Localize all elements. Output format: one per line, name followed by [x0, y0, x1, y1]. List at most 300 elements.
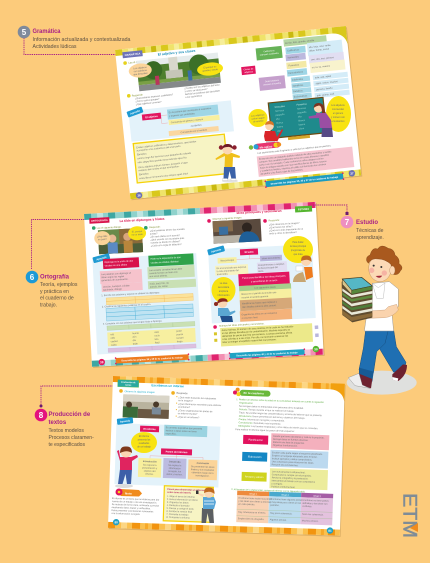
table: evaluation: definidas y las ideas son	[302, 503, 328, 506]
box: desarrollo: Desarrollo	[169, 461, 181, 464]
table: yellow words: baile	[133, 343, 139, 346]
box: pink examples: tildan según las reglas	[101, 275, 125, 279]
callout 7: Estudio: Técnicas de	[356, 228, 384, 234]
section two questions: ¿Qué adjetivos conoces?	[136, 100, 162, 106]
text block: instructions: Conclusiones: Resultado más importante.	[238, 421, 281, 426]
text block: instructions: 1. Realiza un informe sobre la salud en tu comunidad, teniendo en cuenta lo siguiente:	[236, 398, 325, 404]
speech bubble: boy: el nombre	[253, 119, 264, 124]
diagram: clases de adjetivos: Determinativos	[265, 79, 279, 83]
blackboard: clara	[299, 127, 305, 130]
box: pink rule: y secundarias de un texto	[251, 279, 278, 283]
box: introducción: objetivo del	[144, 470, 156, 473]
blackboard: blanco	[276, 122, 284, 125]
speech bubble: yellow	[196, 61, 224, 77]
yellow box: examples	[133, 134, 228, 183]
callout 6: Ortografía: y práctica en	[40, 289, 69, 295]
text: planificación: Decide qué tema abordarás y cuál es tu propósito.	[273, 435, 325, 440]
table: yellow words: día	[133, 340, 137, 342]
text: revisión y edición: Revisa la ortografía y la puntuación.	[272, 476, 309, 481]
section two questions	[144, 224, 187, 248]
section one heading: Observa la siguiente imagen	[124, 390, 155, 394]
yellow box: pasos: 7. Presenta tu trabajo	[166, 513, 189, 517]
text block: instructions: Cuerpo: Información recogida y comprobada.	[239, 418, 285, 423]
box: desarrollo: recogida, los	[168, 470, 182, 473]
box: introducción: informe.	[145, 473, 154, 476]
table: orange	[106, 293, 193, 305]
blackboard: hermosa	[297, 107, 307, 111]
blackboard: buena	[299, 124, 306, 127]
box: planificación: Planificación	[248, 438, 264, 442]
callout 5: Gramática: Gramática	[32, 29, 61, 35]
logo: ETM: ETM	[398, 493, 420, 538]
box: introducción	[138, 458, 161, 478]
callout 7: Estudio: aprendizaje.	[356, 235, 384, 241]
section two questions: un informe?	[178, 406, 191, 409]
box: green examples: una vocal abierta.	[149, 274, 168, 278]
speech bubble: yellow: grande y verde	[202, 68, 219, 73]
page number left: 38	[100, 360, 104, 364]
table: evaluation: Texto sin coherencia.	[302, 513, 324, 517]
table: evaluation: en cada párrafo.	[238, 503, 255, 506]
box: pink rule: Pasos para identificar las ideas principales	[242, 274, 287, 280]
section heading: Observa la siguiente imagen	[212, 216, 242, 221]
definition box: y expresa sus cualidades	[169, 112, 196, 118]
box: el informe: El informe	[143, 428, 156, 431]
table: yellow words: caída	[111, 344, 117, 347]
orange box: Concuerda con el nombre	[180, 128, 208, 134]
callout 8: Producción de textos	[35, 384, 122, 448]
speech bubble: sitting boy: la idea principal	[290, 245, 306, 248]
speech bubble: teacher: y número con	[331, 116, 346, 119]
diagram: clases de adjetivos: qué, cuánto, cuál	[317, 92, 335, 97]
diagram: clases de adjetivos: Demostrativos	[288, 70, 304, 75]
yellow box: examples: camino largo flor hermosa casa pequeña día soleado	[137, 152, 192, 160]
tag: estudio	[295, 206, 312, 212]
box: brown step: dan detalles sobre la idea central.	[242, 304, 277, 309]
yellow text box	[220, 323, 313, 347]
section questions: ¿Qué es lo más importante de un	[269, 228, 304, 232]
box: orange step: Organiza las ideas en un esquema	[241, 312, 278, 316]
yellow box: examples: Ejemplos:	[139, 173, 149, 176]
table: yellow words: Ismael	[177, 337, 184, 340]
text: idea principal	[215, 264, 248, 276]
table: evaluation	[236, 491, 333, 525]
section one heading: Lee el siguiente artículo	[128, 59, 155, 65]
text block: instructions: Bibliografía: Las fuentes empleadas y otros datos de interés que se consultan.	[238, 425, 318, 430]
section two questions: ¿Qué palabras tienen dos vocales	[150, 228, 186, 233]
box: pink examples	[100, 269, 142, 284]
yellow box: pasos: 8. Comparte tu informe	[166, 516, 191, 520]
yellow box: examples: acompañar a los sustantivos del enunciado.	[136, 145, 181, 152]
page number left: 36	[137, 193, 141, 198]
section two questions: ¿Qué sucede con la palabra país	[150, 237, 185, 242]
heading pill: en tu cuaderno	[233, 387, 271, 397]
tag: aprendo: Aprendo	[96, 256, 107, 261]
diagram: clases de adjetivos: Indefinidos	[292, 79, 304, 82]
text paragraph: nota: cuenta de un trabajo o de una investigación.	[112, 500, 157, 505]
section heading	[207, 216, 242, 223]
section one heading: Lee el siguiente diálogo.	[97, 226, 122, 230]
yellow box: pasos: 1. Elige el tema del informe	[167, 495, 196, 499]
text block: instructions: Organización	[239, 401, 253, 405]
text: elaboración: Resume las conclusiones.	[272, 464, 299, 467]
table: evaluation: y las ideas son claras y precisas	[238, 500, 272, 504]
speech bubble: orange: que describen	[133, 72, 149, 76]
blackboard: pequeña	[297, 111, 307, 115]
box: definition: específico.	[166, 433, 177, 436]
speech bubble: sitting girl: secundaria	[218, 286, 230, 289]
page title: Escribimos un informe	[151, 383, 184, 388]
diagram: clases de adjetivos: Gentilicios	[293, 84, 304, 88]
pink text box: Érase una vez un pequeño pueblo rodeado de altas montañas y verdes	[259, 150, 332, 161]
blackboard: alta	[298, 115, 302, 119]
box: pink words	[101, 282, 143, 292]
text block: instructions: Título: Se escribe según las características y el tema del informe que se presenta	[239, 411, 322, 417]
panel: aprendo: 3. Completa con las palabras que tengan hiato o diptongo.	[103, 320, 163, 326]
box: green examples	[147, 265, 195, 279]
diagram: clases de adjetivos: Calificativos	[263, 49, 275, 53]
diagram: clases de adjetivos: precisan al nombre	[263, 82, 282, 86]
lavender squares	[315, 325, 319, 337]
text paragraph: nota	[111, 497, 160, 517]
callout 5: Gramática	[18, 26, 131, 56]
bottom bar left	[115, 353, 190, 364]
yellow box: examples: estos libros mi hermana dos amigos aquel árbol	[139, 172, 189, 180]
panel: aprendo	[126, 97, 234, 142]
speech bubble: boy: varían según	[251, 116, 266, 121]
pink text box: hacia la antigua escuela con sus mochilas llenas de libros nuevos	[260, 160, 327, 170]
character: boy carrying books	[342, 246, 417, 395]
character: boy with phone	[196, 487, 216, 523]
photo: students	[213, 219, 262, 244]
box: planificación	[243, 435, 268, 445]
panel: aprendo: accidentes	[191, 123, 203, 128]
page title left: La tilde en diptongos y hiatos	[119, 217, 165, 223]
speech bubble: sitting girl: La idea	[220, 283, 228, 285]
text paragraph: nota: El informe es un texto que se elabora para dar	[112, 497, 159, 502]
spread: ortografía y estudio	[84, 202, 325, 368]
box: introducción: presentación y	[142, 467, 158, 470]
speech bubble: sitting boy: Para hallar	[292, 241, 304, 244]
diagram: clases de adjetivos: Calificativos	[287, 48, 300, 53]
callout 5: Gramática: Actividades lúdicas	[32, 44, 77, 50]
text block: instructions: Se recogen datos en entrevistas a las personas de tu localidad.	[239, 405, 304, 410]
table: evaluation: y hay ideas poco claras en los	[270, 501, 302, 505]
text: ideas secundarias: Complementan o amplían	[258, 263, 285, 267]
box: pink rule	[238, 272, 290, 286]
yellow text box: alimentan de peces que hoy son escasos. La pesca excesiva afecta	[222, 331, 293, 338]
box: green words: poesía, tía, reúne	[150, 285, 169, 289]
box: conclusión	[188, 459, 217, 480]
tag: aprendo: Aprendo	[130, 109, 141, 116]
page number right: 39	[314, 347, 318, 351]
box: idea principal: Idea principal	[220, 259, 235, 262]
speech bubble: sitting boy	[283, 236, 313, 263]
box: yellow step	[239, 289, 292, 301]
text paragraph: nota: empleando datos reales y verificables.	[112, 506, 151, 510]
speech bubble: orange	[128, 62, 152, 79]
section two questions: Responde	[132, 93, 143, 98]
box: yellow step: Busca en el párrafo la oración que	[241, 291, 277, 296]
table: yellow words: aún	[132, 336, 137, 339]
callout 6: Ortografía: Ortografía	[40, 274, 70, 280]
callout 8: Producción de textos: Textos modelos	[48, 428, 84, 434]
yellow box: pasos: 6. Escribe la versión final	[166, 510, 193, 514]
character: sitting boy	[293, 255, 313, 282]
pill: nota: Nota	[125, 492, 132, 496]
tag: aprendo: Aprendo	[120, 419, 131, 424]
section questions: texto y cómo lo identificas?	[269, 231, 298, 235]
callout 6: Ortografía: el cuaderno de	[40, 296, 74, 302]
speech bubble: sitting girl: información	[218, 294, 230, 297]
pink text box	[257, 147, 354, 177]
section two questions: Responde:	[176, 392, 188, 395]
table: evaluation: Nivel 2	[281, 494, 290, 497]
speech bubble: teacher: en género	[333, 112, 344, 115]
callout 8: Producción de textos: Procesos claramen-	[48, 435, 94, 441]
page number right	[313, 346, 319, 352]
diagram: clases de adjetivos: uno, dos, tres, primero	[311, 56, 335, 61]
bottom bar: Desarrolla las páginas 35, 36 y 37 de tu cuaderno de trabajo	[271, 176, 339, 186]
text: elaboración: Emplea un lenguaje apropiado para el lector.	[272, 454, 318, 459]
definition box	[167, 104, 219, 120]
diagram: clases de adjetivos: Numerales	[288, 55, 300, 59]
panel: aprendo	[207, 241, 316, 324]
section two questions: ¿Qué están haciendo los estudiantes	[178, 396, 217, 400]
box: pink examples: Las palabras con diptongo se	[101, 272, 132, 276]
box: pink words: aguántate, diálogo	[103, 288, 123, 292]
section one heading	[119, 389, 156, 394]
text paragraph: nota: Debe presentar conclusiones coherentes	[111, 509, 154, 513]
callout 7: Estudio: Estudio	[356, 220, 378, 226]
text block: instructions: Período: Tiempo durante el que se realizará el trabajo.	[239, 408, 295, 413]
callout 8: Producción de textos: Producción de	[48, 412, 91, 418]
callout 7: Estudio: 7	[345, 218, 350, 227]
speech bubble: yellow: Sí, porque	[132, 230, 143, 234]
table: yellow words: cielo	[154, 332, 160, 334]
speech bubble: girl: El informe	[139, 435, 150, 438]
text: idea principal: lo más importante del	[217, 269, 239, 273]
table: yellow words: puerta	[176, 333, 184, 336]
diagram: clases de adjetivos: algún, varios, muchos	[315, 80, 339, 85]
speech bubble: yellow: El parque es	[203, 65, 217, 69]
speech bubble: sitting girl	[212, 277, 236, 303]
yellow box: examples: Ejemplos:	[137, 153, 147, 156]
page number right	[327, 527, 333, 534]
page title right: Ideas principales y secundarias	[236, 209, 282, 215]
table: evaluation: El informe tiene algunas partes	[270, 498, 303, 502]
callout 8: Producción de textos: te especificados	[48, 442, 85, 448]
text: planificación: Recoge datos en fuentes diversas.	[273, 438, 309, 442]
table: evaluation: Algunos errores.	[270, 518, 287, 522]
yellow box: pasos: 3. Organiza los datos	[167, 501, 189, 505]
box: pink words: canción, huésped, cuídate	[103, 284, 130, 289]
panel: aprendo	[114, 417, 221, 488]
yellow text box: a las colonias y a sus crías. Por ello, es necesario conservar las	[222, 334, 289, 341]
tag: producción de textos: Producción de	[121, 381, 136, 384]
section two questions	[170, 391, 222, 420]
pink text box: y cuadernos limpios, mientras el cálido sol iluminaba los caminos	[260, 163, 327, 173]
yellow text box: en las últimas décadas por la contaminación. Muchas especies se	[222, 328, 291, 335]
yellow box: examples: niño alegre libro grande mesa redonda agua fría	[138, 156, 187, 164]
section two questions: ¿Cómo organizarías las partes de	[178, 409, 213, 413]
section questions: Responde:	[269, 220, 280, 222]
spread: gramática	[115, 26, 362, 202]
text: planificación: Elabora una lista de preguntas.	[273, 441, 305, 445]
box: yellow step: resume el sentido general.	[242, 295, 269, 299]
speech bubble: sitting boy: qué trata	[293, 253, 303, 256]
box: diptongo	[103, 257, 139, 269]
diagram: clases de adjetivos: mi, tu, su, nuestro	[312, 64, 331, 69]
box: green words: maíz, baúl, frío, río	[150, 282, 170, 286]
section two questions: ¿Cuáles son los adjetivos del texto	[184, 83, 221, 90]
text block: instructions	[235, 398, 325, 434]
tag: estudio: ESTUDIO	[298, 208, 309, 211]
text: planificación: Organiza la información.	[273, 444, 298, 448]
callout 6: Ortografía	[26, 220, 90, 308]
callout 5: Gramática: 5	[22, 28, 27, 37]
text: elaboración: Usa conectores para relacionar las ideas.	[272, 460, 314, 465]
speech bubble: teacher: el sustantivo	[332, 120, 345, 123]
section two questions: cuando se divide en sílabas?	[151, 241, 181, 245]
page number right	[348, 170, 355, 177]
section two questions: ¿Cómo está el parque?	[135, 98, 160, 103]
box: ideas secundarias: Ideas secundarias	[262, 256, 281, 260]
callout 6: Ortografía: 6	[30, 273, 35, 282]
yellow box: examples: Existen adjetivos calificativos y determinativos, que pueden	[136, 140, 197, 149]
section three heading	[213, 322, 265, 329]
section two questions: y cómo se relacionan?	[184, 88, 208, 93]
box: orange step: o resumen final.	[242, 316, 258, 320]
section one heading	[123, 58, 155, 65]
section questions: ¿Qué observas en la imagen?	[269, 222, 300, 226]
section two questions: Señala las palabras que describen	[185, 89, 221, 96]
yellow box: pasos: sobre tema de interés	[167, 491, 192, 495]
diagram: clases de adjetivos: adjetivos	[244, 70, 254, 74]
box: definition: Es un texto expositivo que presenta	[166, 426, 203, 431]
text: elaboración: Escribe cada parte según el esquema planificado.	[272, 451, 323, 456]
character: boy red shirt	[264, 121, 283, 143]
tag: producción de textos	[118, 380, 139, 387]
text: idea principal: texto leído.	[217, 273, 229, 276]
box: hiato: Hiato es la separación de dos	[150, 256, 182, 261]
table: evaluation: párrafos.	[270, 504, 280, 507]
speech bubble: teacher	[326, 96, 351, 132]
table: yellow words	[107, 328, 196, 347]
pink text box: campos. Sus amables habitantes vivían en casas blancas y sencillas	[259, 153, 330, 164]
table: yellow words: leía	[155, 339, 159, 341]
section two questions: ¿Qué información necesitan para elaborar	[178, 403, 221, 407]
yellow text box: Aves marinas. El número de aves marinas en la costa se ha reducido	[222, 325, 294, 332]
table: yellow words: peine	[176, 331, 183, 333]
box: green examples: Las vocales cerradas llevan tilde	[149, 267, 183, 272]
text: revisión y edición: Lee nuevamente tu informe final.	[272, 470, 306, 474]
text block: instructions: Introducción: Breve presentación del tema y objetivos del trabajo.	[239, 415, 306, 420]
blackboard: Femenino	[297, 104, 308, 107]
section questions: ¿Qué hacen los niños?	[269, 225, 293, 229]
table: evaluation: El informe tiene todas sus partes	[238, 497, 273, 501]
section two questions: ¿Qué palabras expresan cualidades?	[135, 93, 174, 100]
blackboard: hermoso	[275, 109, 285, 113]
box: elaboración: Elaboración	[248, 455, 262, 459]
panel: aprendo	[92, 248, 201, 354]
text: elaboración: Incluye ejemplos y datos comprobados.	[272, 457, 313, 462]
box: desarrollo	[163, 458, 186, 479]
speech bubble: girl: resultados	[139, 442, 150, 445]
diagram: clases de adjetivos: este, ese, aquel	[315, 75, 332, 79]
yellow box: examples: Otros adjetivos indican número, posesión o lugar	[138, 161, 188, 169]
box: introducción: Introducción	[143, 460, 157, 464]
table: yellow words: fuego	[177, 341, 183, 343]
section two questions: ¿Cuál es la regla de tildación?	[151, 243, 182, 248]
table: evaluation: El informe no tiene partes	[302, 499, 330, 503]
box: conclusión: obtenidos luego de la	[192, 471, 214, 475]
box: conclusión: finales y los resultados	[191, 468, 215, 472]
blackboard: pequeño	[275, 113, 285, 117]
blackboard: blanca	[298, 120, 306, 123]
bottom bar right: Desarrolla las páginas 40 y 41 de tu cuaderno de trabajo	[236, 351, 298, 357]
callout 6: Ortografía: Teoría, ejemplos	[40, 282, 78, 288]
section two questions: a los sustantivos	[185, 94, 203, 99]
box: introducción: Se expone la	[143, 465, 157, 467]
yellow box: pasos: 2. Busca información en libros	[167, 498, 199, 502]
photo: park	[136, 52, 221, 91]
yellow box: pasos: Pasos para desarrollar un informe	[167, 489, 205, 492]
section two questions: un informe escrito?	[178, 412, 198, 416]
box: revisión y edición	[241, 472, 267, 482]
callout 6: Ortografía: trabajo.	[40, 302, 57, 308]
speech bubble: boy: Los adjetivos	[251, 113, 265, 118]
speech bubble: orange: Los adjetivos	[133, 66, 148, 70]
concept: el adjetivo: El adjetivo	[145, 115, 158, 119]
page number left	[98, 359, 105, 365]
table: evaluation: Hay poca coherencia.	[270, 512, 293, 516]
text: planificación	[271, 433, 329, 450]
check markers	[214, 332, 217, 342]
box: pink examples: generales de acentuación.	[101, 278, 129, 282]
table: blue	[106, 304, 194, 321]
table: evaluation: Hay coherencia en el texto.	[238, 511, 266, 515]
section three heading: Subraya las ideas principales y secundarias.	[219, 322, 265, 328]
speech bubble: orange: en país?	[98, 239, 108, 241]
box: orange step	[240, 309, 292, 322]
blackboard: Masculino	[275, 106, 286, 109]
speech bubble: orange: ¿Hay tilde	[97, 235, 108, 238]
tag: ortografía: ORTOGRAFÍA	[91, 219, 108, 223]
yellow box: Concuerda en género y número	[171, 118, 204, 124]
section questions	[263, 217, 304, 236]
text: revisión y edición: y corrígelo.	[271, 482, 283, 486]
table: yellow words: raíz	[110, 333, 115, 336]
pill: practice heading	[249, 141, 281, 150]
box: elaboración	[242, 452, 267, 462]
pink text box: de piedra y las flores rojas de los jardines.	[260, 168, 304, 176]
diagram: clases de adjetivos: dulce, fuerte, suave	[309, 47, 330, 53]
tag: producción de textos: textos	[125, 384, 132, 387]
page number right: 37	[350, 171, 354, 176]
spread: producción de textos	[108, 376, 346, 537]
table: purple row	[108, 344, 196, 352]
speech bubble: orange: son palabras	[134, 69, 148, 73]
box: green words	[148, 279, 196, 289]
pill: nota	[116, 488, 142, 496]
speech bubble: girl	[131, 432, 157, 453]
box: green examples: cuando forman un hiato con	[149, 271, 178, 275]
diagram: clases de adjetivos: Clases de	[244, 68, 254, 71]
table: yellow words: Raúl	[155, 342, 160, 344]
text: ideas secundarias: la idea principal del	[258, 266, 278, 270]
speech bubble: sitting boy: pregúntate de	[291, 249, 306, 252]
